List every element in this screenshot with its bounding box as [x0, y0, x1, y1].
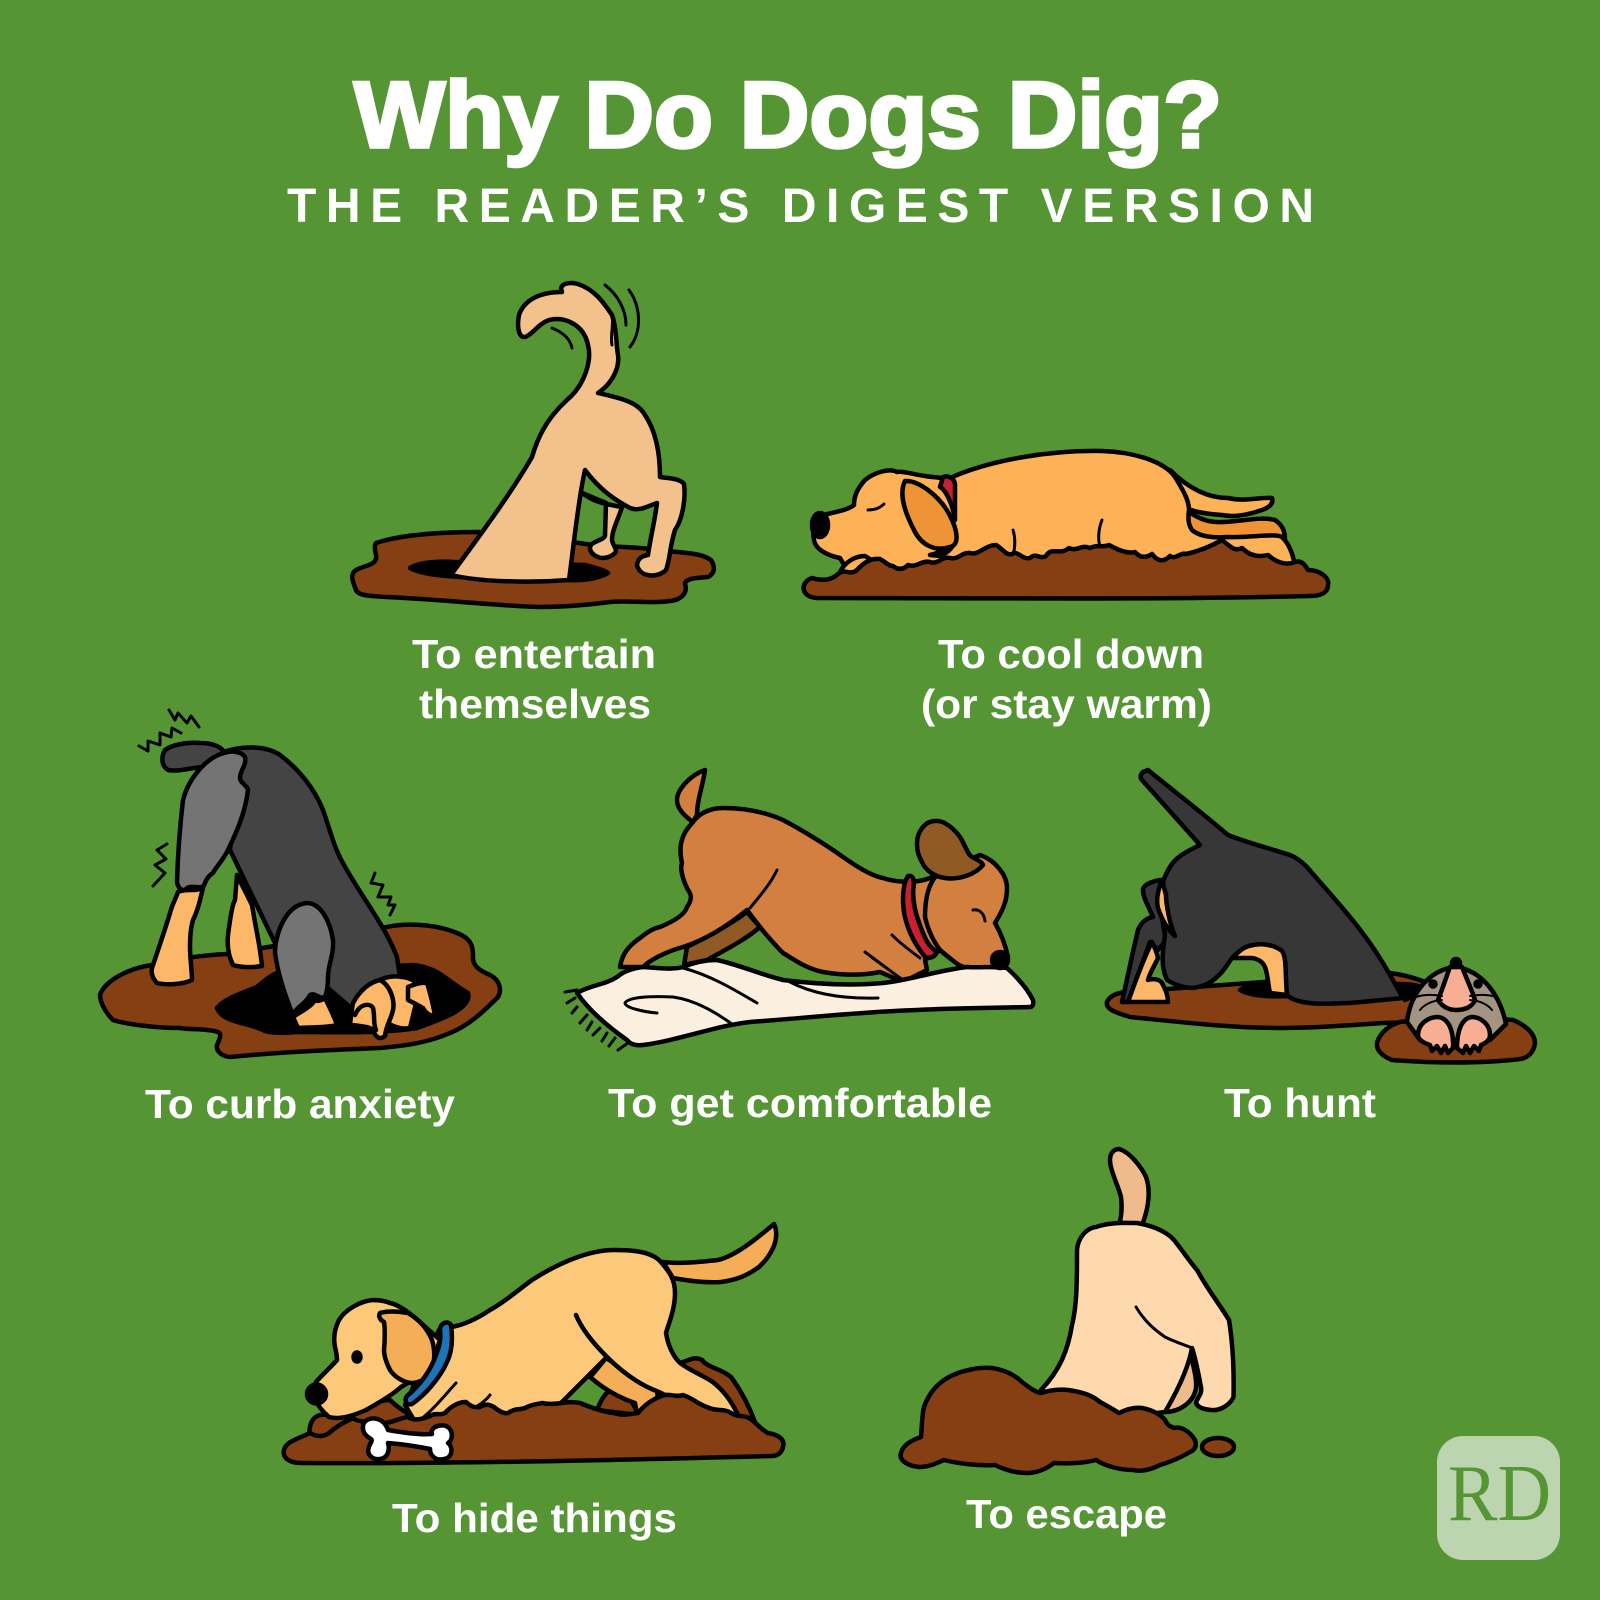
label: to cool down or stay warm	[921, 631, 1212, 727]
label: to entertain themselves	[412, 631, 656, 727]
dog 4: dog nuzzling a blanket	[565, 770, 1033, 1050]
title: Why Do Dogs Dig?	[354, 62, 1222, 167]
dog 6: hiding a bone	[284, 1224, 783, 1463]
mole	[1407, 959, 1506, 1053]
label: to cool down or stay warm: To cool down	[938, 631, 1204, 677]
label: to curb anxiety: To curb anxiety	[145, 1081, 455, 1127]
label: to escape: To escape	[966, 1491, 1167, 1537]
bone	[363, 1418, 452, 1459]
subtitle: THE READER’S DIGEST VERSION	[287, 180, 1314, 233]
logo: RD badge: RD	[1448, 1450, 1551, 1538]
dog 5: doberman hunting a mole	[1107, 770, 1535, 1062]
label: to hunt: To hunt	[1224, 1080, 1376, 1126]
label: to get comfortable: To get comfortable	[608, 1080, 992, 1126]
dog 2: lying on dirt to cool down	[804, 451, 1328, 598]
label: to entertain themselves: themselves	[419, 681, 651, 727]
dog 7: escaping	[900, 1149, 1234, 1473]
label: to hide things: To hide things	[392, 1495, 677, 1541]
head in the hole	[350, 976, 435, 1038]
dog 1: entertaining itself, wagging tail	[352, 283, 714, 607]
logo: RD badge	[1437, 1436, 1560, 1560]
label: to entertain themselves: To entertain	[412, 631, 656, 677]
label: to cool down or stay warm: (or stay warm)	[921, 681, 1212, 727]
dog 3: anxious black and tan dog digging	[100, 710, 500, 1057]
